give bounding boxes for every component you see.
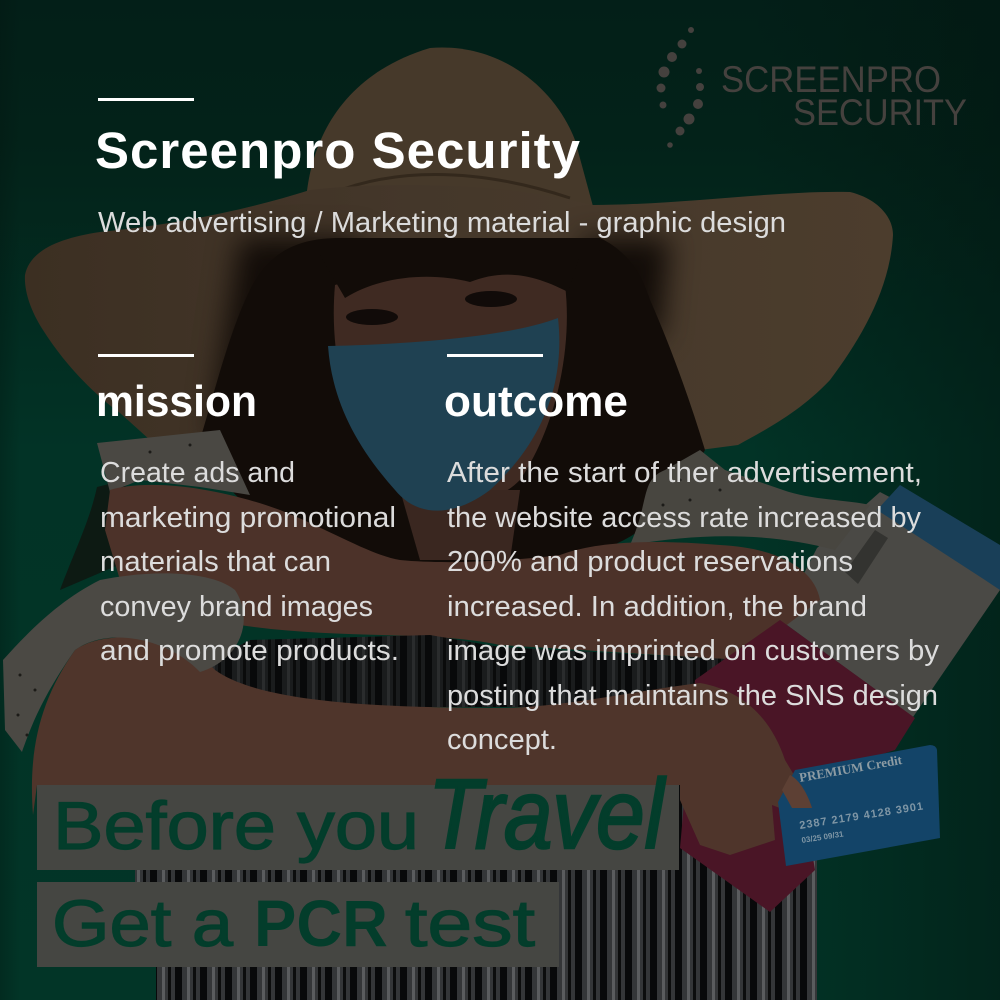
suitcase [135, 780, 817, 1000]
face mask [328, 318, 559, 511]
ad banner: Before you Travel: Travel [428, 759, 666, 869]
outcome body: posting that maintains the SNS design [447, 680, 938, 712]
credit card: 03/25 09/31 [801, 829, 845, 845]
logo wordmark: SCREENPRO [721, 59, 941, 100]
panel: outcome [444, 354, 939, 756]
suitcase handle band [195, 635, 745, 707]
mission body: marketing promotional [100, 502, 396, 534]
heading rule [98, 98, 194, 101]
title: Screenpro Security [95, 122, 581, 179]
hair [200, 238, 705, 570]
outcome body [447, 457, 939, 756]
thumb [782, 775, 812, 808]
mission body: Create ads and [100, 457, 295, 489]
outcome body: the website access rate increased by [447, 502, 921, 534]
outcome body: concept. [447, 724, 557, 756]
ad banner: Before you Travel: Before you [53, 788, 419, 864]
ad banner: Get a PCR test [37, 882, 559, 967]
outcome heading: outcome [444, 377, 628, 426]
outcome body: increased. In addition, the brand [447, 591, 867, 623]
outcome body: After the start of ther advertisement, [447, 457, 922, 489]
blouse left ruffle [97, 430, 250, 495]
mission heading: mission [96, 377, 257, 426]
mission body: and promote products. [100, 635, 399, 667]
upper arm [105, 485, 820, 660]
subtitle: Web advertising / Marketing material - graphic design [98, 207, 786, 239]
outcome body: 200% and product reservations [447, 546, 853, 578]
passport [680, 620, 915, 912]
logo: Screenpro Security [656, 27, 967, 148]
boarding pass [780, 485, 1000, 717]
hat band [333, 174, 570, 198]
ad banner: Get a PCR test: test [405, 886, 535, 960]
face [334, 269, 567, 504]
fringe [320, 255, 580, 298]
mission body: convey brand images [100, 591, 373, 623]
credit card: PREMIUM Credit [798, 752, 904, 785]
left hair curls [60, 480, 130, 590]
neck [400, 490, 520, 560]
ad banner: Get a PCR test: Get a [52, 886, 233, 960]
ad banner: Before you Travel [37, 759, 679, 870]
eyes [346, 291, 517, 325]
blouse left sleeve [3, 444, 244, 752]
mission body [100, 457, 399, 667]
logo wordmark: SECURITY [793, 92, 967, 133]
outcome body: image was imprinted on customers by [447, 635, 939, 667]
lower arm and hand [32, 637, 812, 855]
credit card [778, 745, 940, 866]
hat brim [25, 185, 893, 450]
credit card: 2387 2179 4128 3901 [799, 801, 924, 832]
blouse right [630, 450, 870, 550]
panel: mission [96, 354, 399, 667]
logo wordmark [721, 59, 967, 133]
ad banner: Get a PCR test: PCR [254, 886, 388, 960]
logo dots [656, 27, 704, 148]
mission body: materials that can [100, 546, 331, 578]
hat crown [306, 47, 594, 210]
brim shadows [210, 238, 670, 440]
